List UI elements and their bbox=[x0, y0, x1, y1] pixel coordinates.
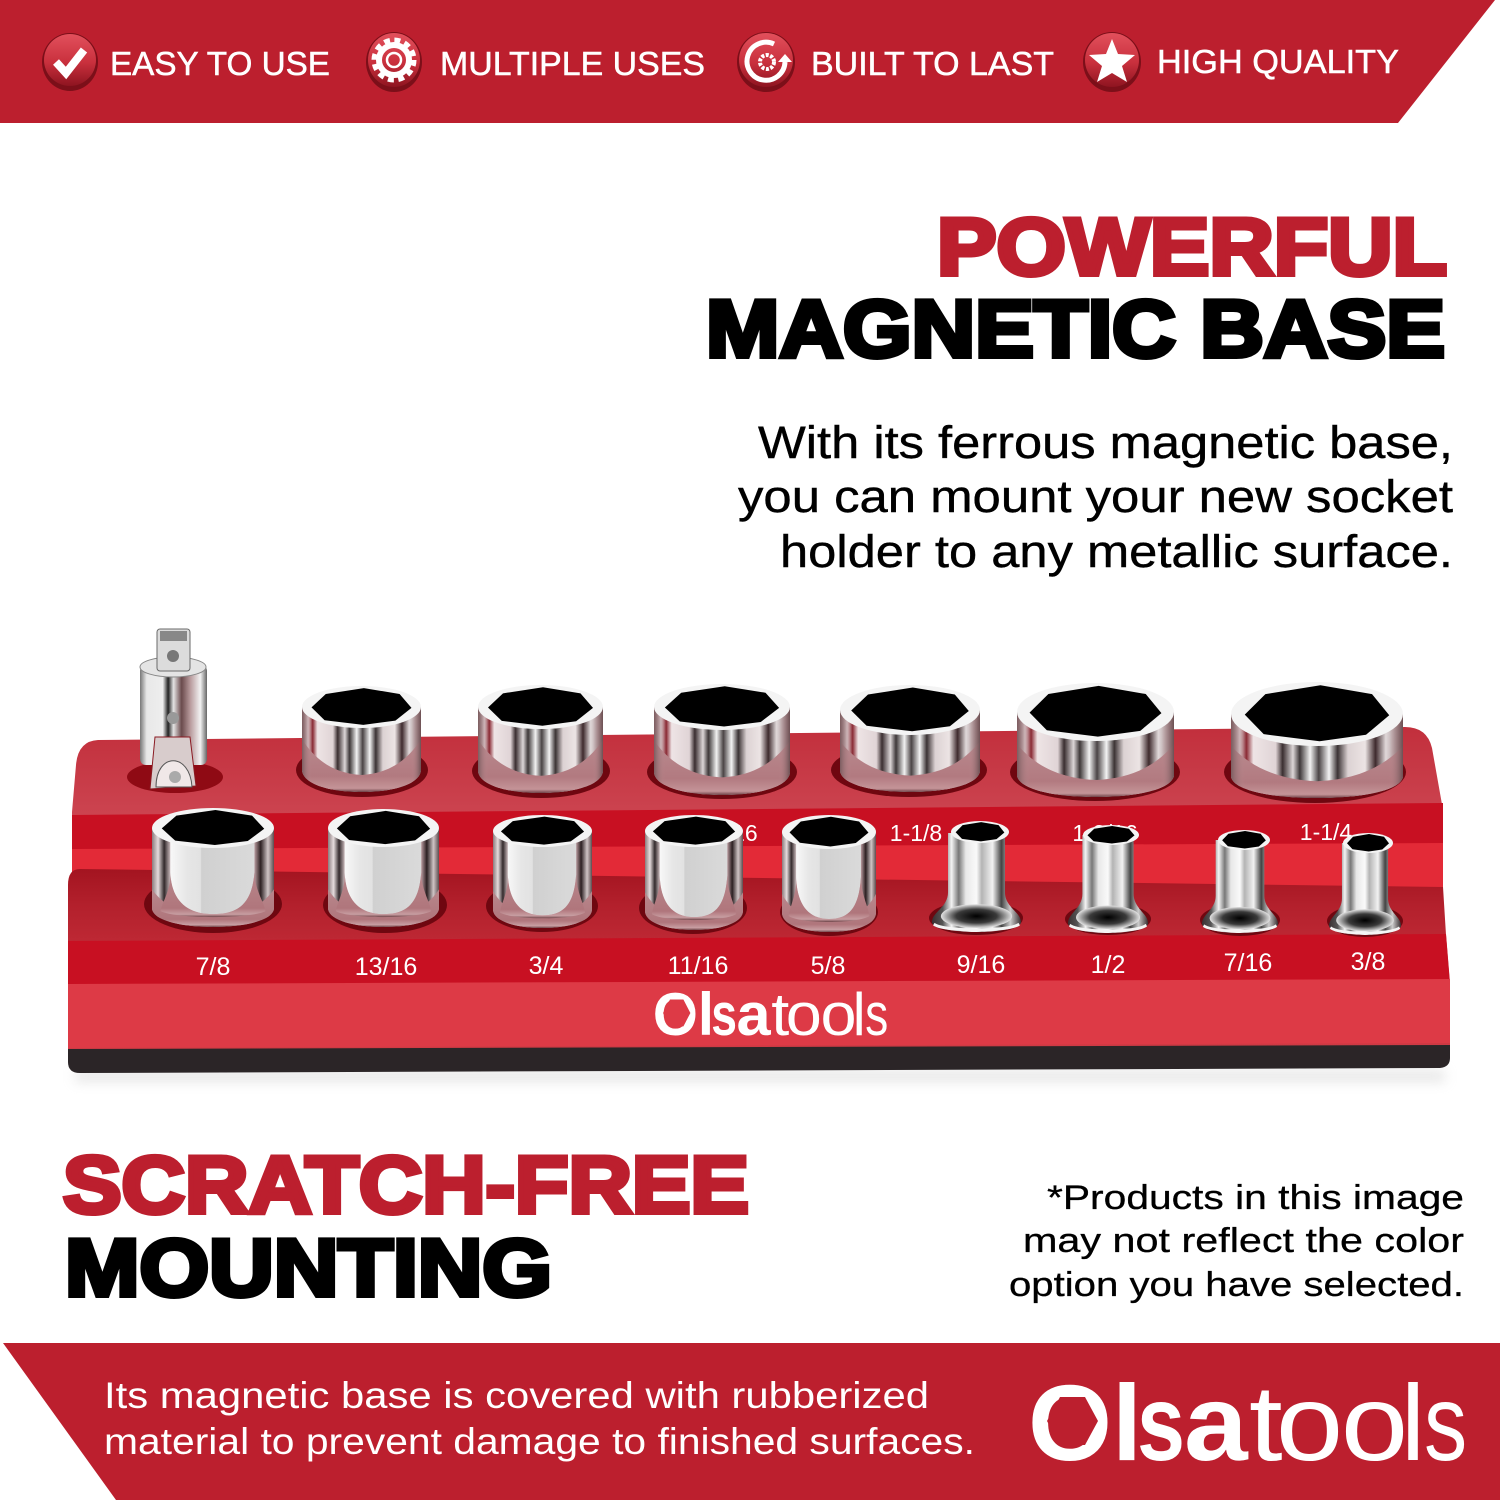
back row size labels: 1-1/8 bbox=[890, 820, 942, 846]
label: built to last: BUILT TO LAST bbox=[811, 45, 1054, 82]
text block: magnetic base description: With its ferrous magnetic base, bbox=[758, 417, 1453, 468]
front row size labels bbox=[196, 948, 1385, 981]
text block: disclaimer: option you have selected. bbox=[1009, 1266, 1464, 1304]
text block: rubberized material bbox=[104, 1375, 975, 1462]
front row size labels: 3/8 bbox=[1351, 948, 1385, 976]
rubber base bbox=[68, 1040, 1450, 1073]
back block bbox=[72, 727, 1443, 890]
front row size labels: 7/8 bbox=[196, 953, 230, 981]
front row size labels: 11/16 bbox=[668, 952, 728, 980]
front row size labels: 13/16 bbox=[355, 953, 417, 981]
front row size labels: 3/4 bbox=[529, 952, 563, 980]
front block bbox=[68, 869, 1450, 1049]
top banner bbox=[0, 0, 1495, 123]
label: high quality: HIGH QUALITY bbox=[1157, 43, 1399, 80]
front row sockets bbox=[144, 808, 878, 936]
text block: disclaimer bbox=[1009, 1179, 1464, 1304]
text block: rubberized material: material to prevent damage to finished surfaces. bbox=[104, 1421, 975, 1462]
front row size labels: 5/8 bbox=[811, 952, 845, 980]
heading: powerful magnetic base: POWERFUL bbox=[937, 202, 1447, 292]
ground shadow bbox=[75, 1070, 1445, 1082]
front row size labels: 9/16 bbox=[957, 951, 1005, 979]
logo on holder bbox=[653, 980, 888, 1048]
icon: check mark badge bbox=[42, 33, 98, 91]
text block: rubberized material: Its magnetic base is covered with rubberized bbox=[104, 1375, 929, 1416]
product: magnetic socket holder bbox=[68, 629, 1450, 1082]
back row size labels: 1-3/16 bbox=[1072, 820, 1138, 846]
label: multiple uses: MULTIPLE USES bbox=[440, 45, 705, 82]
front row size labels: 7/16 bbox=[1224, 949, 1272, 977]
heading: powerful magnetic base bbox=[706, 202, 1447, 374]
icon: gear badge bbox=[366, 32, 422, 92]
socket adapter bbox=[127, 629, 223, 793]
small sockets bbox=[929, 821, 1403, 937]
heading: powerful magnetic base: MAGNETIC BASE bbox=[706, 284, 1445, 374]
text block: disclaimer: may not reflect the color bbox=[1023, 1222, 1464, 1260]
text block: magnetic base description: holder to any metallic surface. bbox=[780, 526, 1453, 577]
back row size labels bbox=[692, 819, 1352, 846]
icon: star badge bbox=[1083, 32, 1141, 92]
heading: scratch-free mounting: SCRATCH-FREE bbox=[63, 1140, 749, 1230]
logo: Olsatools bbox=[1028, 1362, 1467, 1484]
text block: magnetic base description bbox=[738, 417, 1454, 577]
back row sockets bbox=[296, 682, 1406, 803]
bottom banner bbox=[3, 1343, 1500, 1500]
front row size labels: 1/2 bbox=[1091, 951, 1125, 979]
label: easy to use: EASY TO USE bbox=[110, 45, 330, 82]
back row size labels: 1-1/4 bbox=[1300, 819, 1352, 845]
heading: scratch-free mounting: MOUNTING bbox=[65, 1224, 552, 1314]
text block: disclaimer: *Products in this image bbox=[1047, 1179, 1464, 1217]
text block: magnetic base description: you can mount your new socket bbox=[738, 471, 1454, 522]
icon: cycle gear badge bbox=[737, 32, 795, 92]
back row size labels: 1-1/16 bbox=[692, 820, 758, 846]
heading: scratch-free mounting bbox=[63, 1140, 749, 1314]
